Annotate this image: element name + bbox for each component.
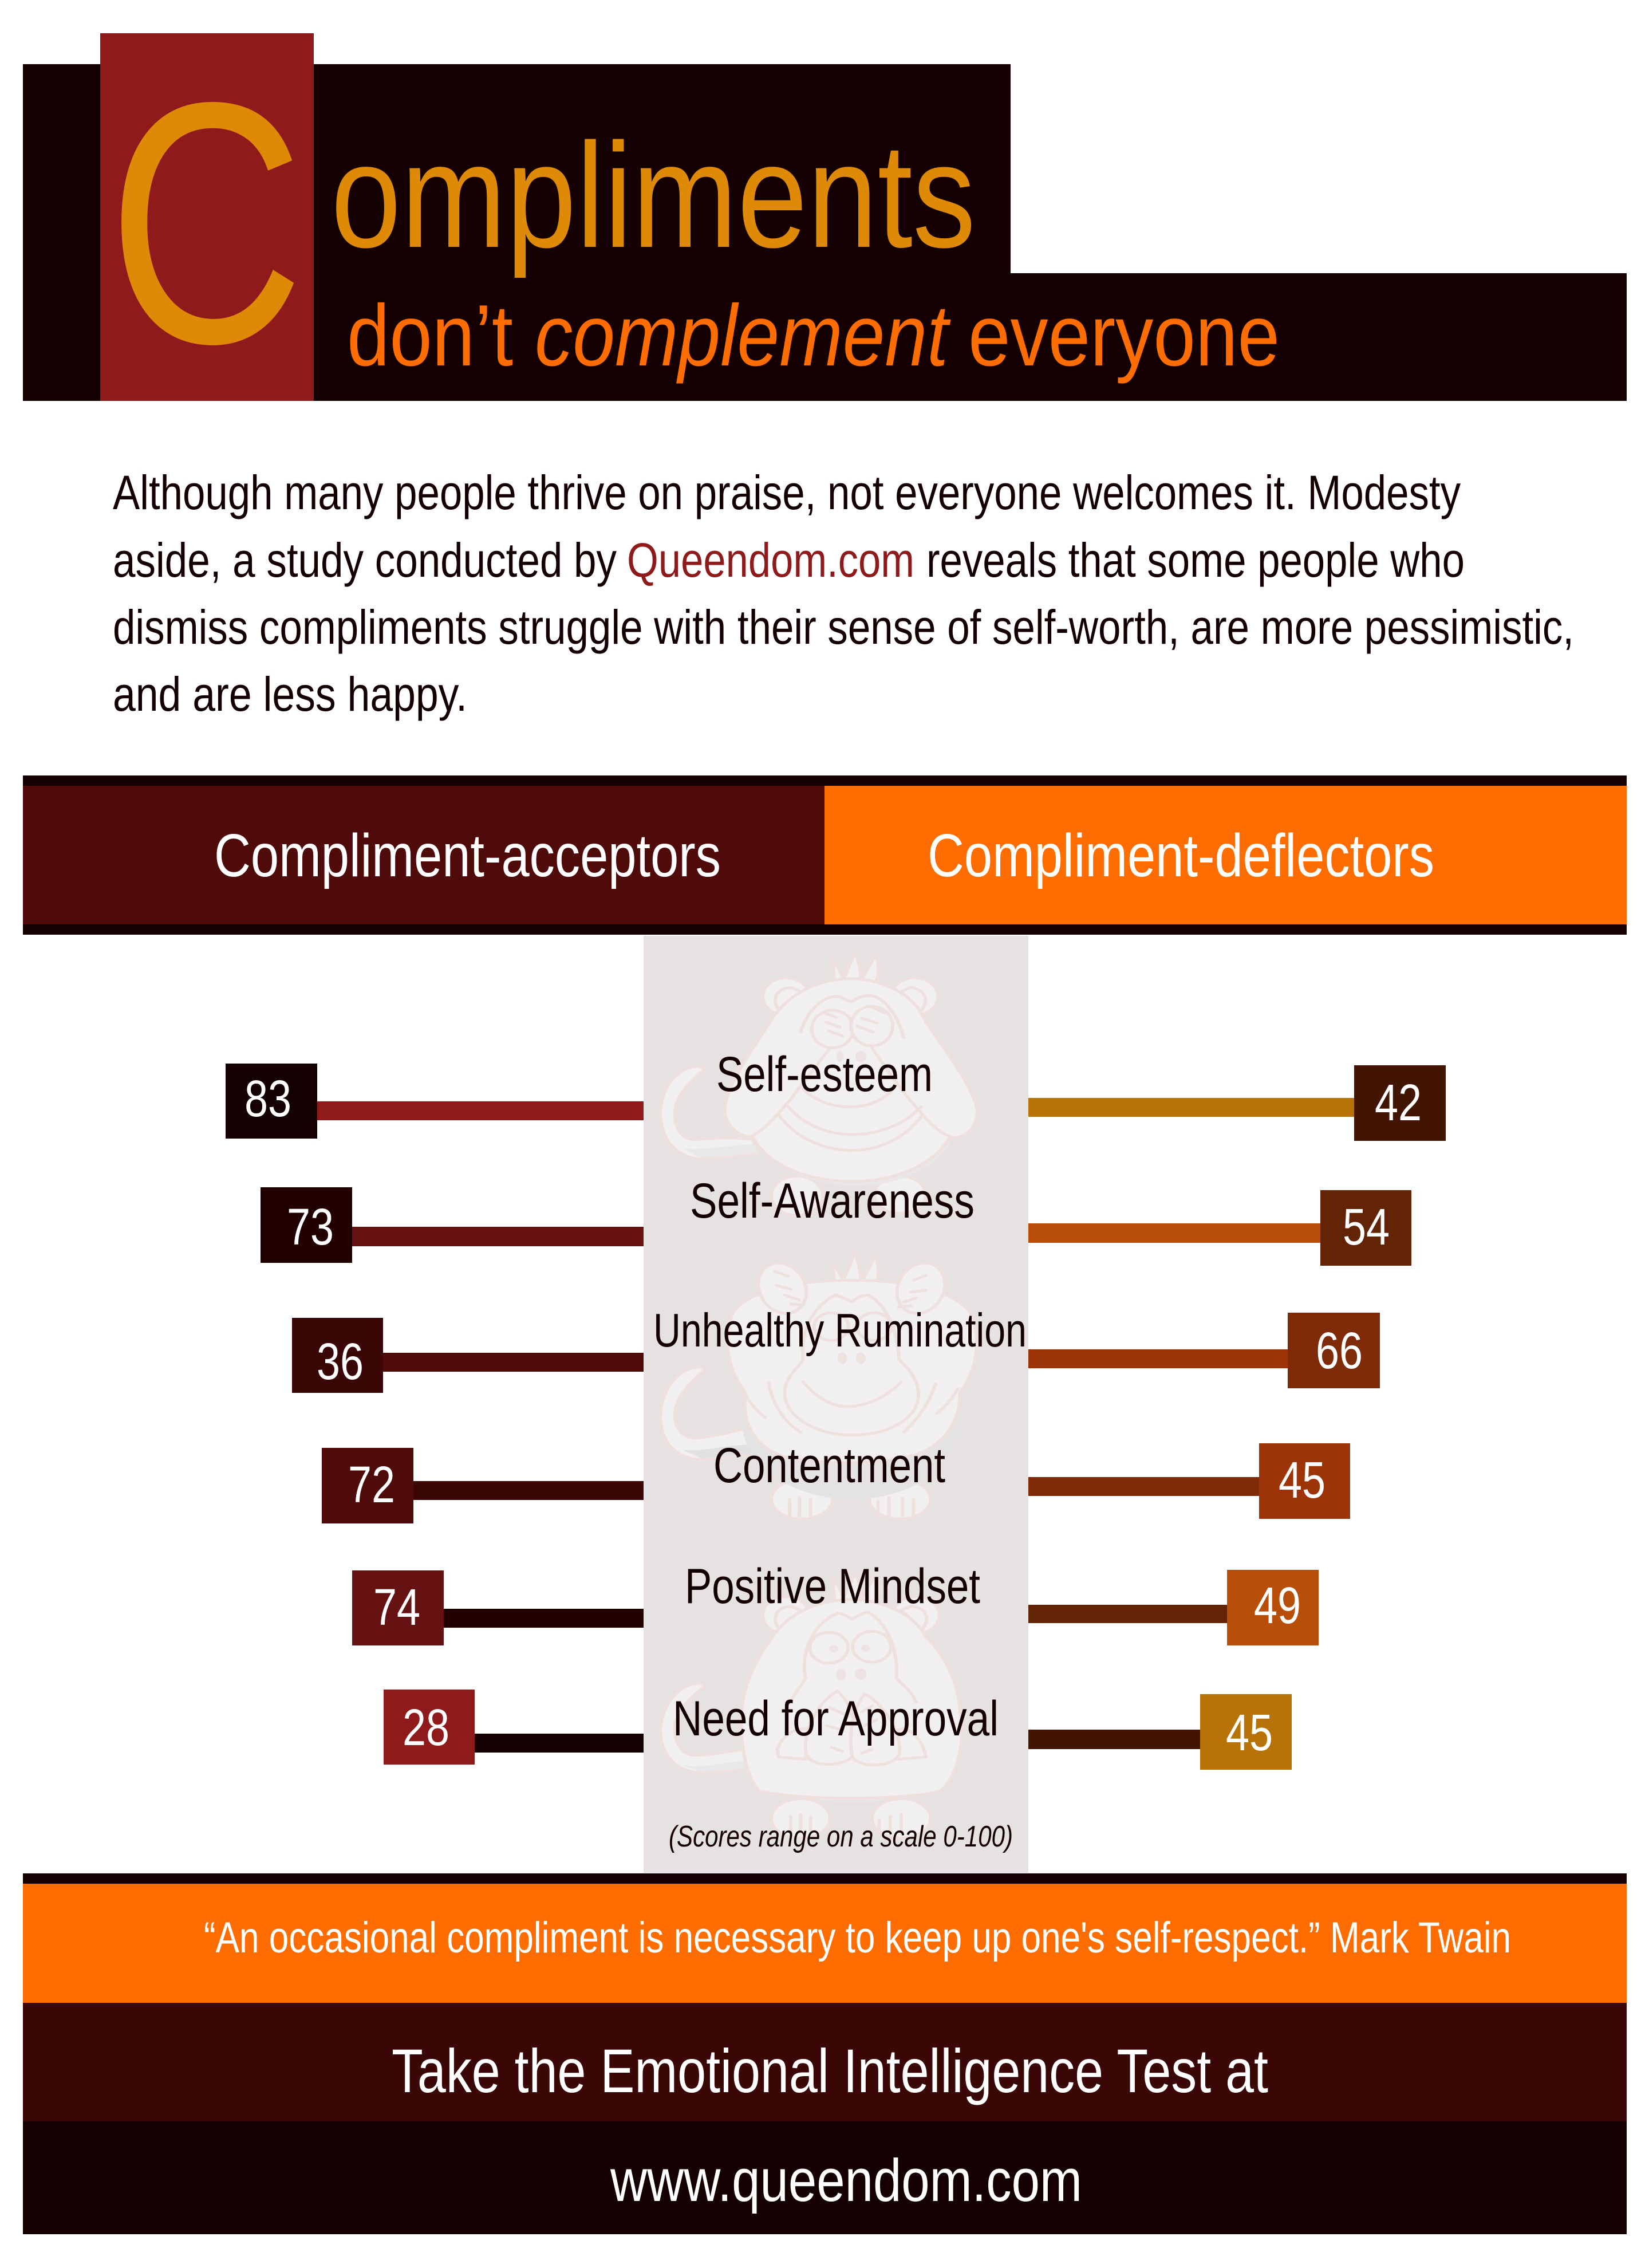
icon: monkey covering ears [660,1253,977,1519]
label: need for approval: Need for Approval [673,1691,999,1746]
score row: positive mindset 49: 49 [1254,1577,1301,1635]
call to action band: Take the Emotional Intelligence Test at [392,2036,1268,2105]
score row: self-esteem 42: 42 [1375,1074,1422,1132]
score row: unhealthy rumination 36 [292,1318,644,1393]
subtitle [347,287,1280,384]
quote band [23,1884,1627,2003]
score row: unhealthy rumination 66: 66 [1316,1322,1363,1380]
call to action band [23,2003,1627,2121]
score row: self-awareness 54 [1028,1190,1411,1266]
score row: need for approval 45: 45 [1226,1704,1273,1762]
title: ompliments: ompliments [331,113,976,279]
score row: unhealthy rumination 36: 36 [317,1333,364,1391]
subtitle: don’t [347,287,513,384]
label: unhealthy rumination: Unhealthy Rumination [653,1304,1027,1357]
right scores: compliment-deflectors [1028,1065,1446,1770]
title: drop capital C: C [108,31,304,415]
icon: monkey covering eyes [660,953,977,1215]
left scores: compliment-acceptors [226,1064,644,1765]
title banner [23,31,1627,415]
score row: positive mindset 49 [1028,1570,1319,1645]
center labels [653,1047,1027,1853]
score row: contentment 72 [322,1448,644,1523]
score row: positive mindset 74: 74 [373,1579,420,1636]
score row: self-awareness 54: 54 [1343,1199,1390,1256]
score row: contentment 72: 72 [348,1456,395,1514]
label: positive mindset: Positive Mindset [685,1559,980,1614]
score row: need for approval 45 [1028,1694,1292,1770]
intro paragraph: and are less happy. [113,667,467,721]
label: self-awareness: Self-Awareness [690,1174,975,1228]
url band [23,2121,1627,2234]
intro paragraph: aside, a study conducted by [113,533,617,587]
heading: acceptors: Compliment-acceptors [214,822,721,889]
score row: self-esteem 42 [1028,1065,1446,1141]
score row: positive mindset 74 [352,1570,644,1645]
subtitle: everyone [968,287,1280,384]
intro paragraph: reveals that some people who [926,533,1465,587]
heading: deflectors: Compliment-deflectors [928,822,1434,889]
score row: self-esteem 83: 83 [244,1070,291,1128]
score row: self-awareness 73 [261,1187,644,1263]
column header band [23,775,1627,935]
center panel [644,936,1028,1873]
label: contentment: Contentment [713,1438,945,1493]
score row: unhealthy rumination 66 [1028,1313,1380,1388]
note: score scale: (Scores range on a scale 0-100) [669,1820,1013,1853]
intro paragraph [113,466,1574,721]
footer bands [23,1873,1627,2234]
score row: contentment 45: 45 [1279,1452,1325,1509]
intro paragraph: Queendom.com [627,533,914,587]
label: self-esteem: Self-esteem [716,1047,933,1102]
score row: self-esteem 83 [226,1064,644,1139]
score row: need for approval 28: 28 [403,1699,449,1757]
icon: monkey covering mouth [660,1574,962,1838]
score row: contentment 45 [1028,1443,1350,1519]
score row: need for approval 28 [384,1690,644,1765]
subtitle: complement [535,287,951,384]
score row: self-awareness 73: 73 [287,1199,334,1256]
url band: www.queendom.com [610,2147,1082,2214]
